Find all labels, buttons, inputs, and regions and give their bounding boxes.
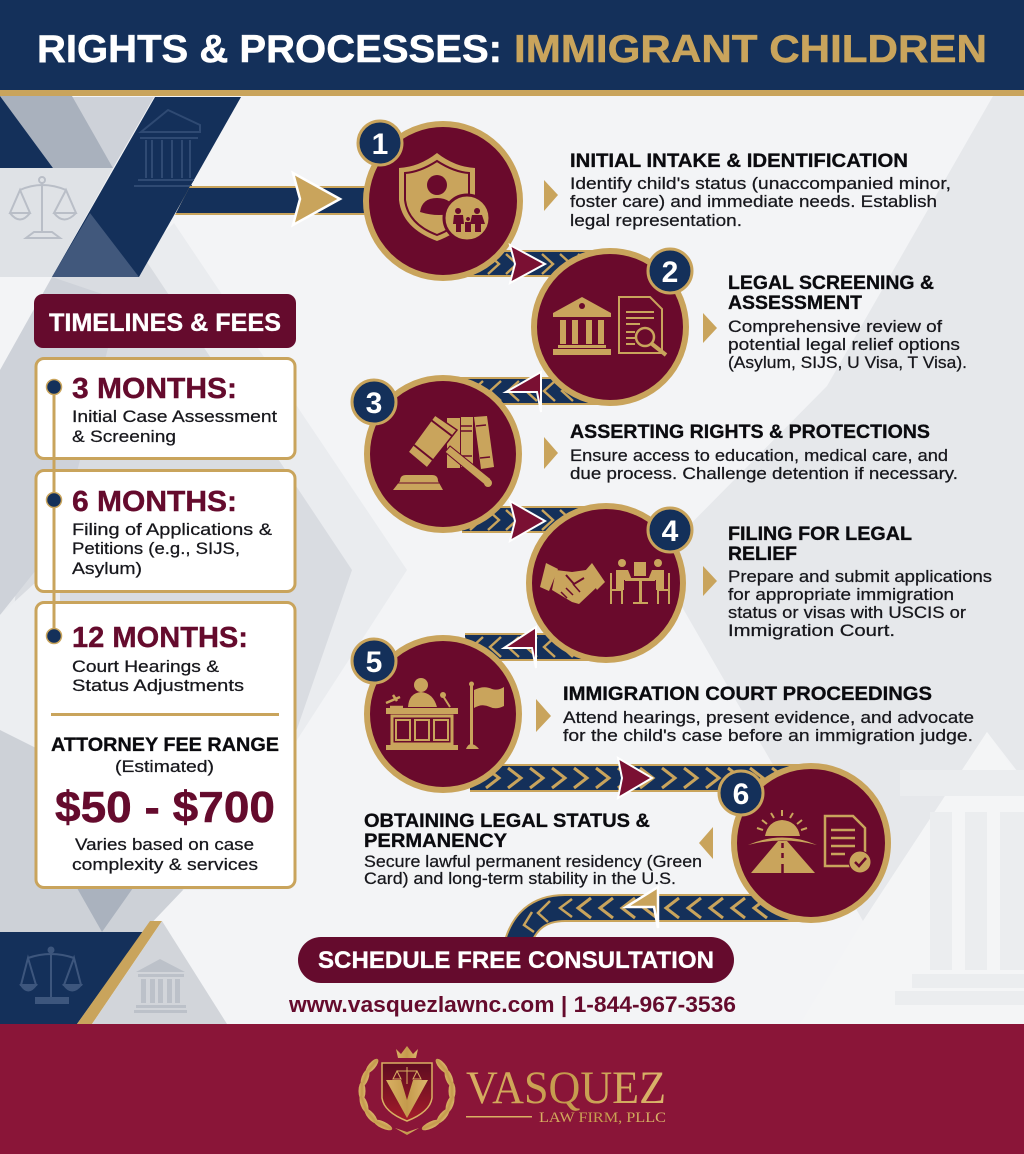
step 6 text: PERMANENCY <box>364 831 507 852</box>
step 5 <box>352 638 519 790</box>
step 6 text: OBTAINING LEGAL STATUS & <box>364 811 650 832</box>
connector band 3 to 4 <box>462 506 600 533</box>
card: 12 months and fees: 12 MONTHS: <box>72 622 248 654</box>
watermark: courthouse bottom-left <box>134 959 187 1013</box>
step 4 text: Prepare and submit applications <box>728 567 992 586</box>
step 2 <box>534 249 692 403</box>
panel: timelines and fees <box>34 294 296 888</box>
step 2 text <box>703 273 967 372</box>
step 5 text: for the child's case before an immigration judge. <box>563 726 973 745</box>
step 5 text <box>536 684 974 745</box>
contact line: www.vasquezlawnc.com | 1-844-967-3536 <box>288 992 736 1017</box>
entry bar <box>175 186 365 215</box>
badge 6 <box>719 771 763 815</box>
timeline line and dots <box>46 380 62 644</box>
step 2 text: LEGAL SCREENING & <box>728 273 934 294</box>
icon: handshake and meeting <box>540 559 669 604</box>
pointer 3 <box>544 437 558 469</box>
watermark: courthouse right <box>895 770 1024 1005</box>
firm subtitle: LAW FIRM, PLLC <box>539 1110 666 1126</box>
arrow: 4 to 5 <box>504 627 536 668</box>
arrow: 1 to 2 <box>510 245 545 283</box>
badge 1: 1 <box>372 128 388 161</box>
step 5 text: Attend hearings, present evidence, and advocate <box>563 708 974 727</box>
arrow: entry <box>293 173 340 225</box>
badge 2: 2 <box>662 256 678 289</box>
arrow: 6 to consultation <box>626 887 658 928</box>
card: 12 months and fees: (Estimated) <box>115 757 214 776</box>
arrow: 5 to 6 <box>618 758 652 798</box>
step 1 text: legal representation. <box>570 211 742 230</box>
watermark: scales top-left <box>10 177 76 238</box>
connector band 5 to 6 <box>470 764 820 792</box>
footer band <box>0 1024 1024 1154</box>
step 1 circle <box>366 124 520 278</box>
badge 3: 3 <box>366 387 382 420</box>
logo crown <box>396 1046 418 1058</box>
badge 2 <box>648 249 692 293</box>
icon: shield with family <box>399 153 490 241</box>
card: 12 months and fees: Varies based on case <box>75 835 254 854</box>
header banner <box>0 0 1024 96</box>
step 1 <box>358 121 520 278</box>
step 3 text: Ensure access to education, medical care, and <box>570 446 948 465</box>
background geometric shapes: left <box>0 223 407 932</box>
pointer 1 <box>544 180 558 211</box>
step 3 circle <box>367 378 519 530</box>
badge 3 <box>352 380 396 424</box>
logo wreath <box>358 1057 456 1135</box>
step 4 text <box>703 524 992 640</box>
step 6 circle <box>734 766 888 920</box>
watermark: courthouse top-left <box>134 110 200 186</box>
badge 5: 5 <box>366 646 382 679</box>
step 4 <box>529 506 692 660</box>
card: 6 months: Filing of Applications & <box>72 520 273 539</box>
icon: gavel and books <box>393 415 494 490</box>
arrow: 2 to 3 <box>506 372 541 412</box>
icon: judge bench and flag <box>386 678 504 750</box>
card: 12 months and fees: Status Adjustments <box>72 676 244 695</box>
step 2 text: potential legal relief options <box>728 335 960 354</box>
step 5 circle <box>367 638 519 790</box>
step 3 text: due process. Challenge detention if necessary. <box>570 464 958 483</box>
card: 6 months <box>36 470 295 592</box>
step 6 text: Secure lawful permanent residency (Green <box>364 852 702 871</box>
badge 6: 6 <box>733 778 749 811</box>
pointer 5 <box>536 699 551 732</box>
step 1 text: foster care) and immediate needs. Establish <box>570 192 937 211</box>
badge 4 <box>648 508 692 552</box>
card: 12 months and fees: ATTORNEY FEE RANGE <box>51 735 279 756</box>
logo shield <box>382 1063 432 1121</box>
icon: sunrise road and approved document <box>748 810 871 873</box>
panel heading: TIMELINES & FEES <box>49 309 281 337</box>
step 4 text: RELIEF <box>728 544 797 565</box>
firm name: VASQUEZ <box>466 1062 666 1114</box>
step 4 text: Immigration Court. <box>728 621 895 640</box>
card: 6 months: Petitions (e.g., SIJS, <box>72 539 240 558</box>
card: 12 months and fees: complexity & services <box>72 855 258 874</box>
card: 12 months and fees: $50 - $700 <box>55 783 275 832</box>
card: 6 months: 6 MONTHS: <box>72 486 237 518</box>
badge 1 <box>358 121 402 165</box>
card: 12 months and fees <box>36 602 295 888</box>
title: IMMIGRANT CHILDREN <box>514 28 987 71</box>
panel heading <box>34 294 296 348</box>
step 4 text: for appropriate immigration <box>728 585 954 604</box>
step 2 circle <box>534 251 686 403</box>
card: 3 months: & Screening <box>72 427 176 446</box>
step 3 text <box>544 422 958 483</box>
step 2 text: (Asylum, SIJS, U Visa, T Visa). <box>728 353 967 372</box>
call to action button: SCHEDULE FREE CONSULTATION <box>318 947 714 974</box>
step 6 text: Card) and long-term stability in the U.S. <box>364 869 676 888</box>
logo scales <box>393 1067 421 1084</box>
step 1 text <box>544 151 951 230</box>
step 1 text: Identify child's status (unaccompanied minor, <box>570 174 951 193</box>
step 6 text <box>364 811 713 888</box>
step 3 <box>352 378 519 530</box>
card: 3 months: Initial Case Assessment <box>72 407 277 426</box>
connector band 4 to 5 <box>465 633 595 661</box>
step 2 text: ASSESSMENT <box>728 293 862 314</box>
card: 3 months: 3 MONTHS: <box>72 373 237 405</box>
bottom-left block <box>0 921 227 1024</box>
watermark: scales bottom-left <box>21 948 81 1003</box>
connector band 6 to consultation <box>516 896 820 950</box>
pointer 6 <box>699 827 713 859</box>
step 2 text: Comprehensive review of <box>728 317 942 336</box>
step 3 text: ASSERTING RIGHTS & PROTECTIONS <box>570 422 930 443</box>
background geometric shapes: right <box>655 96 1024 1024</box>
badge 5 <box>352 639 396 683</box>
arrow: 3 to 4 <box>510 501 545 541</box>
connector band 2 to 3 <box>458 377 605 405</box>
title: RIGHTS & PROCESSES: <box>37 28 502 71</box>
step 4 text: FILING FOR LEGAL <box>728 524 912 545</box>
badge 4: 4 <box>662 515 679 548</box>
step 5 text: IMMIGRATION COURT PROCEEDINGS <box>563 684 932 705</box>
logo V emblem <box>386 1080 428 1118</box>
pointer 4 <box>703 566 717 596</box>
step 4 text: status or visas with USCIS or <box>728 603 966 622</box>
card: 6 months: Asylum) <box>72 559 142 578</box>
connector band 1 to 2 <box>468 250 600 277</box>
call to action button <box>298 937 734 983</box>
step 4 circle <box>529 506 683 660</box>
top-left geometric cluster <box>0 96 241 277</box>
icon: courthouse and document <box>553 297 666 355</box>
card: 12 months and fees: Court Hearings & <box>72 657 220 676</box>
card: 3 months <box>36 358 295 458</box>
step 1 text: INITIAL INTAKE & IDENTIFICATION <box>570 151 908 172</box>
logo <box>358 1046 456 1135</box>
pointer 2 <box>703 313 717 343</box>
step 6 <box>719 766 888 920</box>
